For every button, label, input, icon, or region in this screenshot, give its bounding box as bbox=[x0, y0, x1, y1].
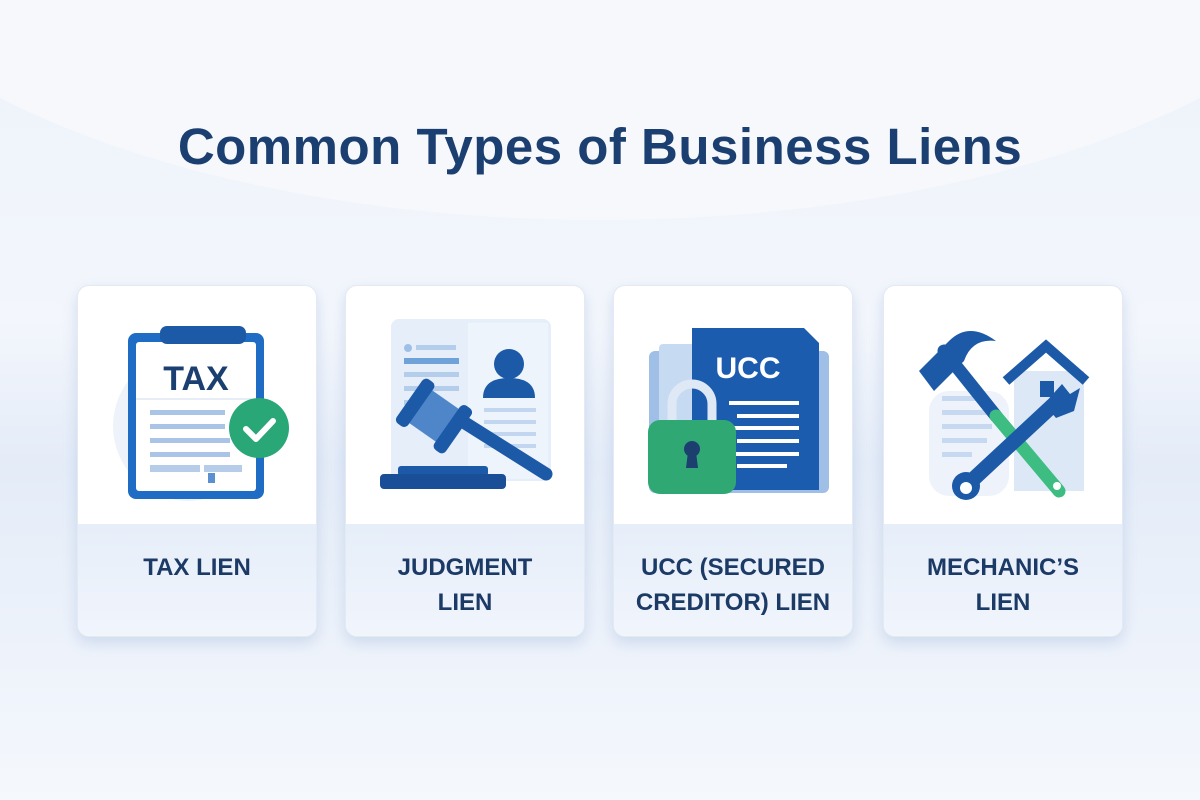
label: UCC (SECURED bbox=[641, 554, 825, 581]
icon: tax clipboard bbox=[113, 326, 289, 501]
icon: hammer, wrench, house bbox=[919, 331, 1090, 500]
icon: gavel and document bbox=[380, 319, 552, 489]
panel: ucc lien bbox=[613, 285, 853, 637]
label: MECHANIC’S bbox=[927, 554, 1079, 581]
title: Common Types of Business Liens bbox=[178, 118, 1022, 175]
label: LIEN bbox=[438, 589, 492, 616]
panel: tax lien bbox=[77, 285, 317, 637]
label bbox=[346, 524, 584, 638]
label: CREDITOR) LIEN bbox=[636, 589, 830, 616]
label: TAX LIEN bbox=[143, 554, 251, 581]
icon: tax clipboard: TAX bbox=[163, 360, 229, 398]
icon: ucc document with lock bbox=[648, 328, 829, 494]
panel: judgment lien bbox=[345, 285, 585, 637]
label bbox=[78, 524, 316, 638]
label: LIEN bbox=[976, 589, 1030, 616]
label bbox=[614, 524, 852, 638]
panel: mechanic's lien bbox=[883, 285, 1123, 637]
label bbox=[884, 524, 1122, 638]
label: JUDGMENT bbox=[398, 554, 532, 581]
icon: ucc document with lock: UCC bbox=[716, 352, 780, 385]
